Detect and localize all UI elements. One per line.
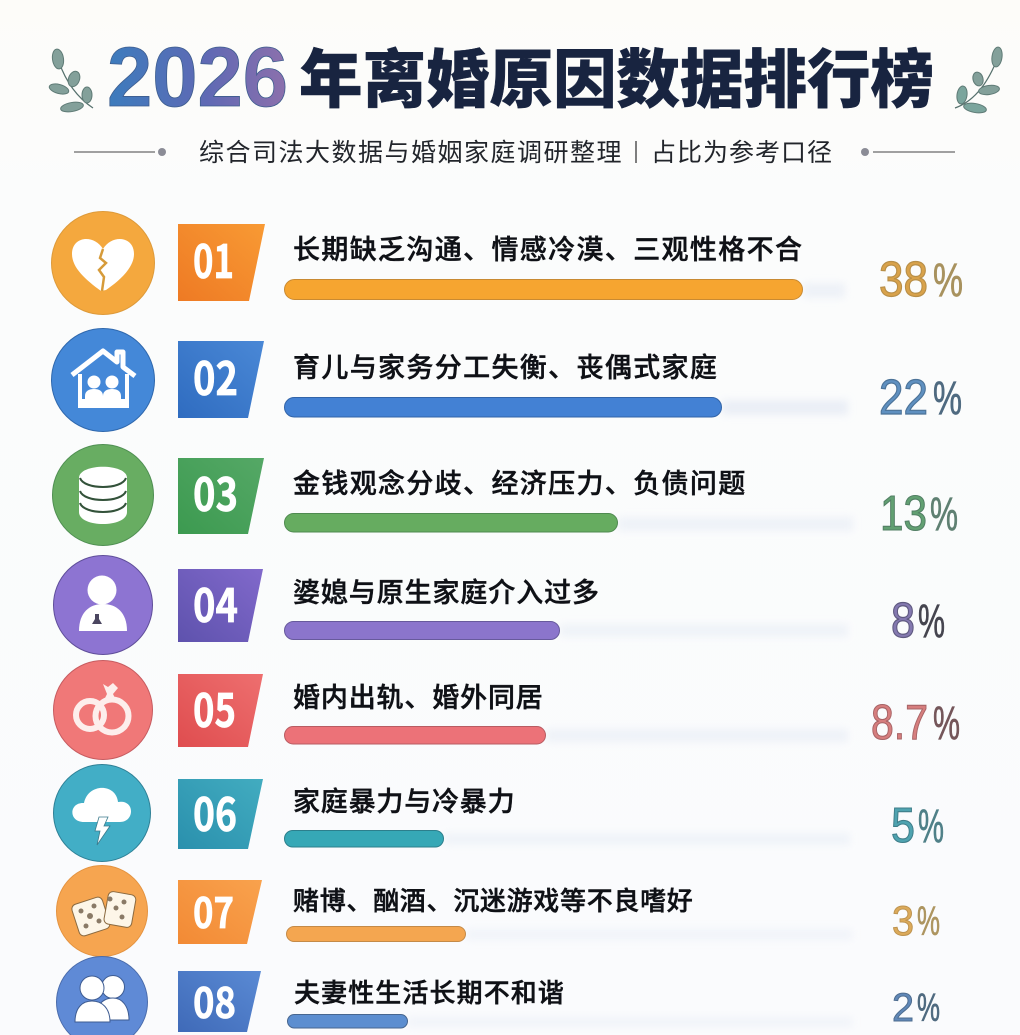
number badge 02	[178, 341, 264, 418]
label: 金钱观念分歧、经济压力、负债问题	[293, 462, 747, 501]
number badge 04	[178, 569, 263, 642]
icon: two people	[56, 956, 148, 1035]
percentage 5%: 5	[891, 799, 915, 853]
icon: coin stack	[52, 444, 154, 546]
percentage 8.7%: %	[933, 696, 960, 749]
percentage 2%: 2	[892, 986, 914, 1030]
subtitle: 占比为参考口径	[651, 139, 833, 167]
percentage 38%	[879, 253, 963, 307]
percentage 22%: %	[933, 371, 962, 424]
percentage 8%: 8	[891, 594, 915, 648]
subtitle: 综合司法大数据与婚姻家庭调研整理	[199, 139, 623, 167]
number badge 03: 03	[193, 459, 238, 525]
icon: dice	[56, 866, 148, 956]
progress bar 3%	[286, 926, 852, 942]
label: 家庭暴力与冷暴力	[293, 780, 515, 819]
label: 长期缺乏沟通、情感冷漠、三观性格不合	[293, 228, 803, 267]
progress bar 8.7%	[284, 726, 848, 744]
title: 年离婚原因数据排行榜	[299, 29, 934, 121]
progress bar 22%	[284, 398, 848, 417]
percentage 22%	[879, 371, 962, 425]
progress bar 8%	[284, 622, 848, 640]
percentage 2%: %	[917, 987, 940, 1030]
number badge 04: 04	[193, 570, 238, 636]
progress bar 2%	[288, 1014, 852, 1028]
row 03: money	[52, 444, 958, 546]
percentage 8%: %	[918, 594, 945, 647]
percentage 38%: %	[933, 253, 963, 306]
row 05: infidelity	[54, 660, 960, 760]
percentage 8%	[891, 594, 945, 648]
title: 2026	[107, 30, 288, 124]
number badge 06	[178, 779, 263, 849]
percentage 13%: %	[930, 487, 958, 540]
number badge 07: 07	[193, 880, 234, 941]
row 04: in-laws	[54, 556, 945, 654]
row 06: violence	[54, 764, 944, 862]
progress bar 13%	[284, 514, 853, 532]
number badge 08: 08	[193, 970, 236, 1031]
percentage 5%: %	[918, 799, 944, 852]
percentage 5%	[891, 799, 944, 853]
percentage 13%: 13	[880, 487, 927, 541]
icon: wedding rings	[54, 660, 152, 760]
number badge 03	[178, 458, 264, 534]
label: 婚内出轨、婚外同居	[293, 676, 544, 715]
row 07: gambling	[56, 866, 940, 956]
percentage 3%: %	[917, 898, 940, 944]
percentage 3%	[892, 897, 940, 944]
number badge 06: 06	[193, 779, 237, 845]
number badge 02: 02	[193, 343, 238, 409]
percentage 22%: 22	[879, 371, 928, 425]
row 01: communication	[52, 212, 963, 314]
label: 赌博、酗酒、沉迷游戏等不良嗜好	[293, 881, 694, 918]
percentage 13%	[880, 487, 958, 541]
number badge 01: 01	[193, 226, 234, 292]
label: 婆媳与原生家庭介入过多	[293, 571, 600, 610]
label: 育儿与家务分工失衡、丧偶式家庭	[293, 346, 718, 385]
icon: left laurel branch	[48, 48, 93, 113]
progress bar 38%	[284, 280, 845, 300]
number badge 07	[178, 880, 262, 944]
number badge 05: 05	[193, 675, 236, 741]
subtitle	[74, 139, 955, 167]
icon: person	[54, 556, 152, 654]
icon: broken heart	[52, 212, 154, 314]
percentage 2%	[892, 986, 940, 1030]
icon: house with family	[52, 328, 154, 432]
row 02: parenting	[52, 328, 962, 432]
percentage 3%: 3	[892, 897, 914, 944]
number badge 08	[178, 970, 261, 1032]
row 08: intimacy	[56, 956, 940, 1035]
progress bar 5%	[284, 830, 850, 847]
number badge 05	[178, 674, 263, 747]
icon: right laurel branch	[955, 46, 1003, 114]
number badge 01	[178, 224, 265, 301]
icon: storm cloud	[54, 764, 150, 862]
percentage 38%: 38	[879, 253, 928, 307]
label: 夫妻性生活长期不和谐	[294, 973, 565, 1010]
percentage 8.7%: 8.7	[871, 696, 928, 750]
